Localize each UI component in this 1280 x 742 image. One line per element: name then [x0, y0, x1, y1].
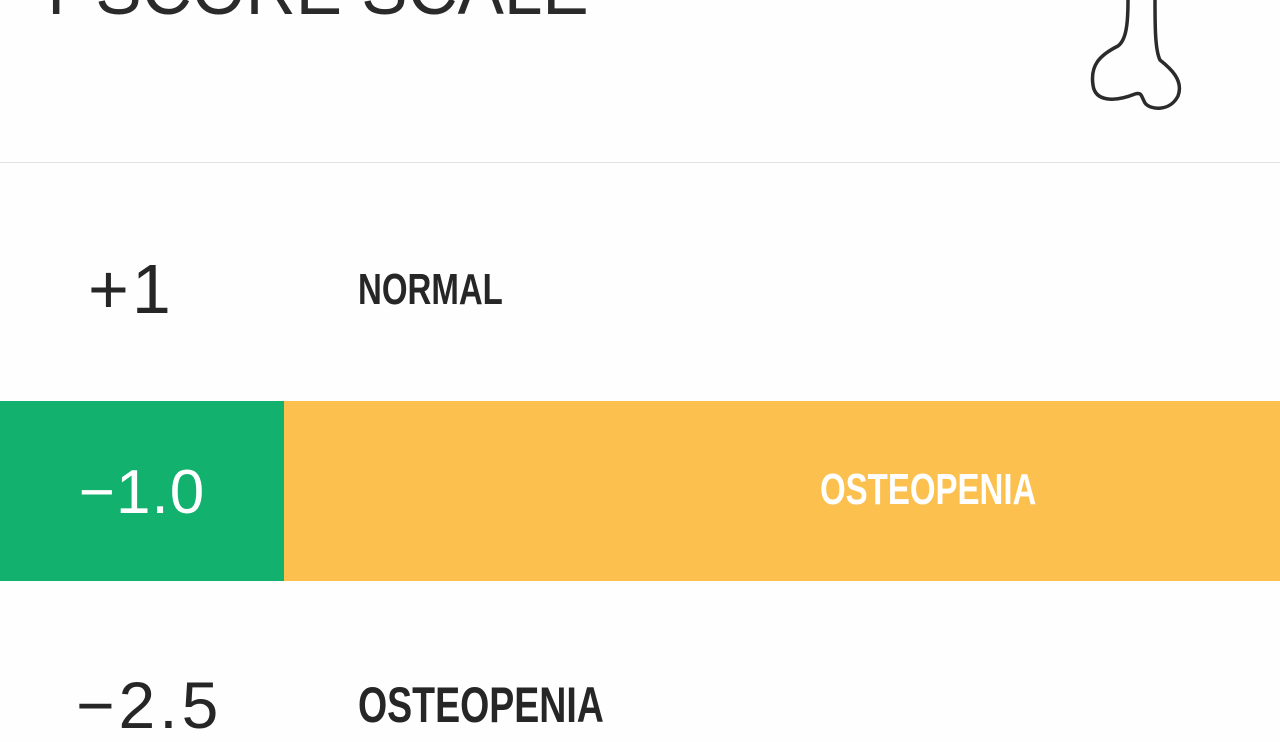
icon: bone	[1090, 0, 1182, 110]
value: +1: +1	[88, 250, 174, 328]
label: normal: NORMAL	[358, 265, 503, 314]
row: -2.5	[76, 668, 604, 742]
row: +1 normal	[88, 250, 503, 328]
value: -1.0 green block: −1.0	[79, 458, 205, 527]
value: -1.0 green block	[0, 401, 284, 581]
label: osteopenia: OSTEOPENIA	[358, 677, 604, 733]
label: osteopenia: OSTEOPENIA	[820, 465, 1036, 514]
row: osteopenia band	[0, 401, 1280, 581]
value: -2.5: −2.5	[76, 668, 222, 742]
